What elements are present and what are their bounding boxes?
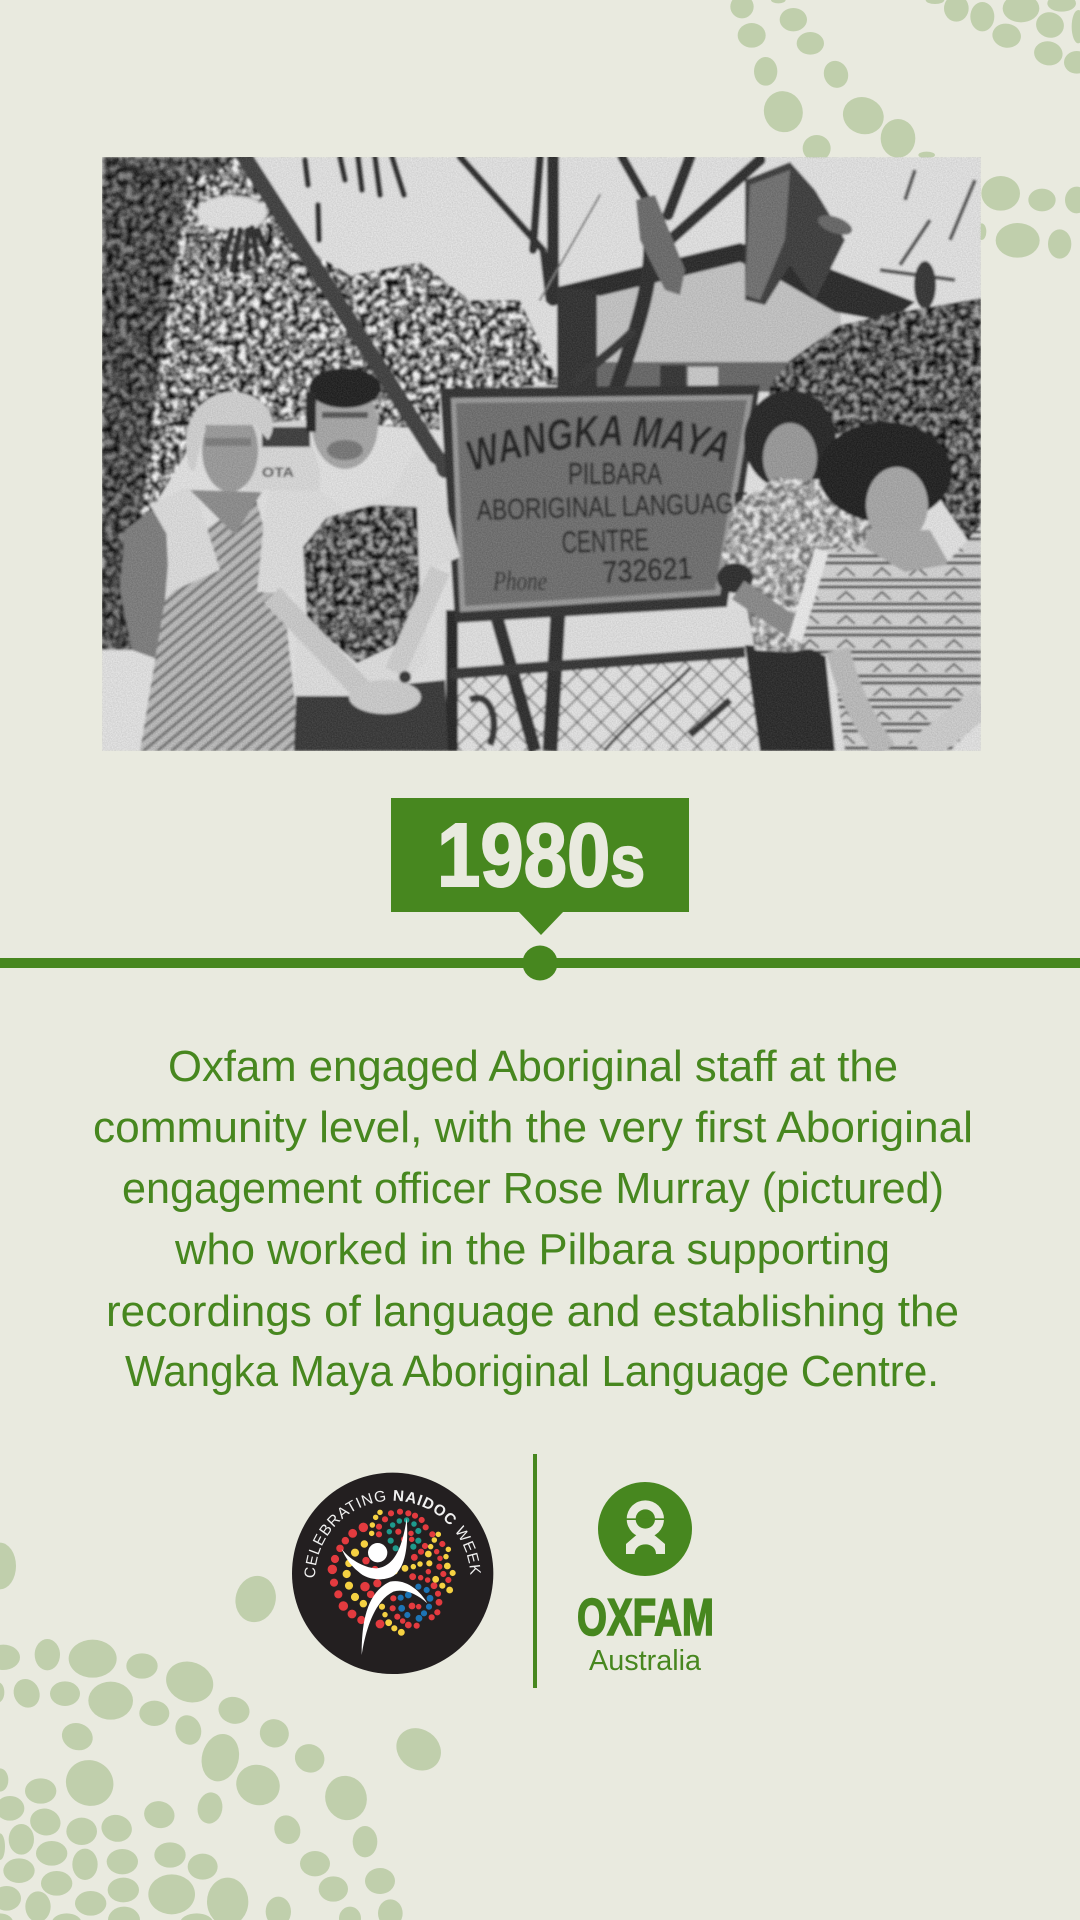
person: woman in geometric blouse [795, 422, 985, 751]
sign board: PILBARA [568, 456, 662, 491]
person: man in printed T-shirt [257, 368, 460, 751]
yellow dots [343, 1510, 455, 1635]
red dots [328, 1509, 451, 1628]
body text: community level, with the very first Aboriginal [93, 1103, 973, 1152]
teal dots [387, 1518, 421, 1551]
sign board: ABORIGINAL LANGUAGE [476, 487, 749, 527]
photo: Wangka Maya sign and four people [102, 157, 981, 751]
person: woman in floral blouse [715, 390, 890, 751]
sign board: WANGKA MAYA [465, 414, 728, 471]
body text: Wangka Maya Aboriginal Language Centre. [125, 1347, 939, 1396]
person: woman in patterned dress [120, 392, 300, 751]
logo: Oxfam Australia: OXFAM [577, 1589, 714, 1647]
body text: who worked in the Pilbara supporting [174, 1225, 890, 1274]
body text [93, 1042, 973, 1396]
logo divider [533, 1454, 537, 1688]
hanging leaves and trunk [574, 162, 975, 392]
Oxfam figure mark [625, 1500, 665, 1554]
vehicle behind people [246, 421, 318, 489]
year label: 1980s [437, 806, 645, 906]
logo: Oxfam Australia [577, 1482, 714, 1677]
decorative dots: bottom left [0, 1543, 449, 1920]
year badge [391, 798, 689, 935]
logo: Oxfam Australia: Australia [589, 1645, 702, 1677]
logo: Celebrating NAIDOC Week [292, 1472, 494, 1674]
foliage: left trees [102, 157, 572, 657]
tree branches [240, 150, 760, 470]
bush [768, 297, 981, 541]
ground and fence [102, 610, 770, 751]
sign board: 732621 [602, 550, 693, 590]
sign board: Phone [492, 566, 547, 596]
blue dots [398, 1584, 433, 1621]
sign board [438, 384, 760, 624]
house [557, 243, 915, 392]
timeline with marker [0, 946, 1080, 980]
body text: recordings of language and establishing the [106, 1287, 959, 1336]
decorative dots: top right [730, 0, 1080, 259]
body text: Oxfam engaged Aboriginal staff at the [168, 1042, 898, 1091]
sign board: CENTRE [561, 522, 649, 560]
logo: Celebrating NAIDOC Week: CELEBRATING NAIDOC WEEK [304, 1490, 481, 1578]
dancing figure [342, 1518, 427, 1655]
body text: engagement officer Rose Murray (pictured) [122, 1164, 944, 1213]
vehicle behind people: OTA [262, 464, 294, 480]
